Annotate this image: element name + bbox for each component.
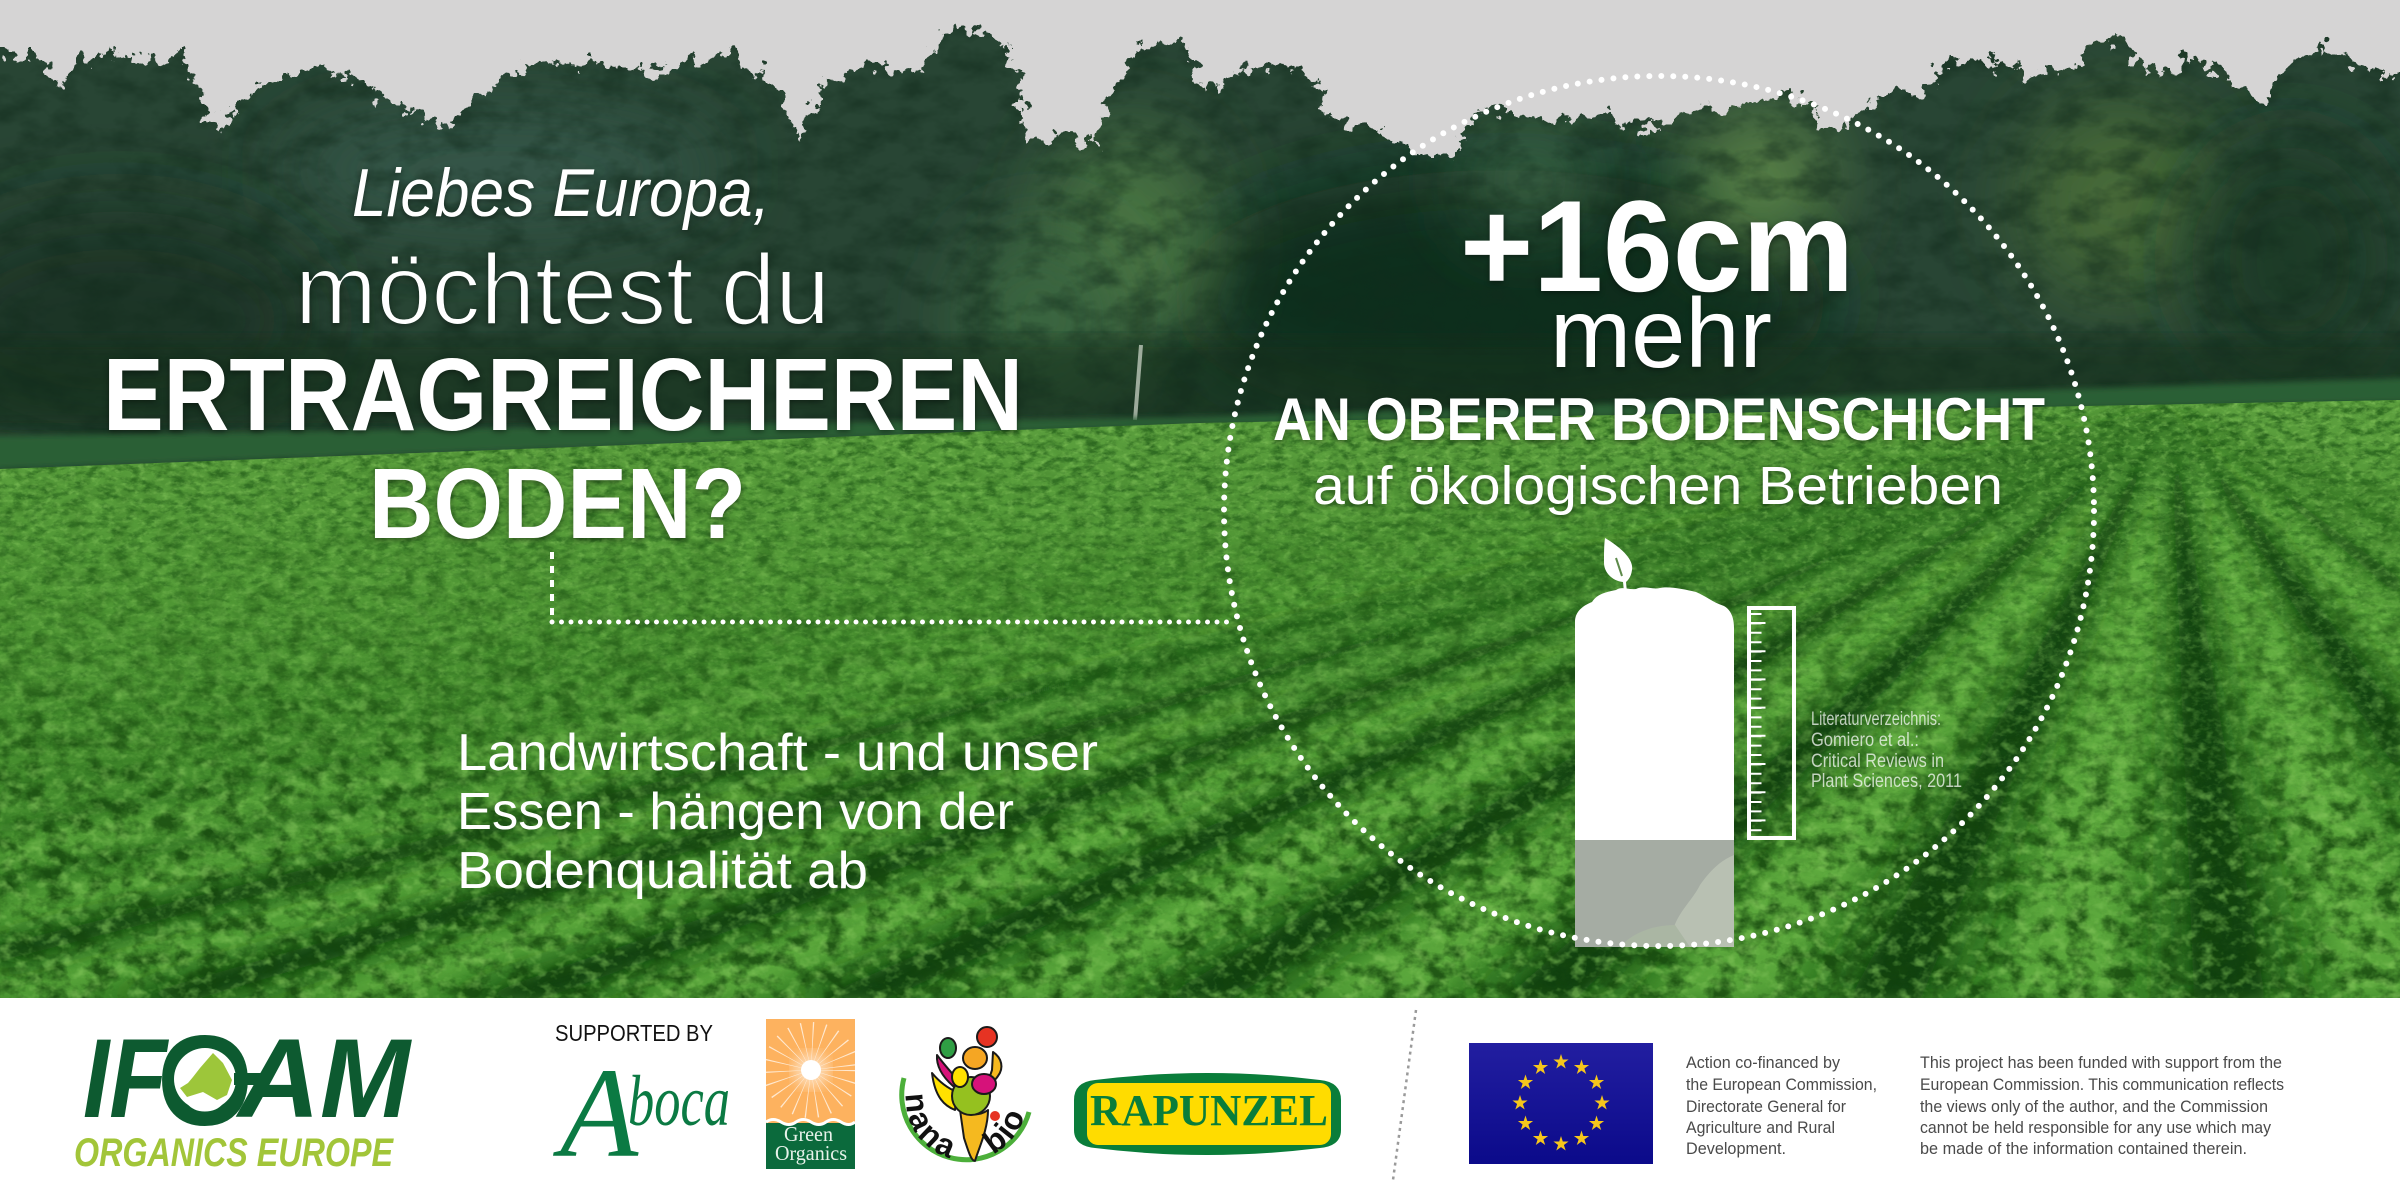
citation bbox=[1811, 709, 1962, 792]
logo: Aboca: boca bbox=[628, 1061, 730, 1141]
body text: Landwirtschaft - und unser bbox=[457, 724, 1098, 782]
body text: Bodenqualität ab bbox=[457, 842, 868, 900]
soil column translucent lower bbox=[1575, 840, 1734, 947]
disclaimer: cannot be held responsible for any use which may bbox=[1920, 1118, 2271, 1137]
co-financing note: Agriculture and Rural bbox=[1686, 1118, 1835, 1137]
dotted connector from headline to circle bbox=[552, 552, 1228, 622]
body text bbox=[457, 724, 1098, 900]
body text: Essen - hängen von der bbox=[457, 783, 1014, 841]
EU flag bbox=[1469, 1043, 1653, 1164]
logo: Aboca: A bbox=[553, 1042, 639, 1184]
citation: Plant Sciences, 2011 bbox=[1811, 771, 1962, 792]
soil column white upper bbox=[1575, 587, 1734, 840]
dotted separator bbox=[1393, 1010, 1416, 1180]
big number: +16cm bbox=[1460, 173, 1854, 319]
logo: Green Organics: Organics bbox=[775, 1141, 847, 1165]
disclaimer bbox=[1920, 1053, 2284, 1158]
disclaimer: This project has been funded with support from the bbox=[1920, 1053, 2282, 1072]
citation: Gomiero et al.: bbox=[1811, 730, 1919, 751]
icon: soil column with leaf bbox=[1575, 538, 1734, 947]
caps label: AN OBERER BODENSCHICHT bbox=[1273, 386, 2045, 453]
logo: nana bio bbox=[899, 1026, 1032, 1162]
logo: Green Organics: Green bbox=[784, 1122, 833, 1146]
dotted circle bbox=[1224, 76, 2094, 946]
headline line: ERTRAGREICHEREN: ERTRAGREICHEREN bbox=[103, 337, 1023, 452]
logo: IFOAM Organics Europe: M bbox=[320, 1016, 413, 1141]
logo: Green Organics bbox=[766, 1019, 855, 1169]
logo: IFOAM Organics Europe: IF bbox=[83, 1016, 169, 1141]
footer band bbox=[0, 998, 2400, 1200]
logo: IFOAM Organics Europe bbox=[74, 1010, 413, 1175]
headline line: möchtest du: möchtest du bbox=[295, 234, 830, 346]
disclaimer: be made of the information contained therein. bbox=[1920, 1139, 2247, 1158]
citation: Critical Reviews in bbox=[1811, 751, 1944, 772]
logo subtitle: ORGANICS EUROPE bbox=[74, 1131, 394, 1175]
citation: Literaturverzeichnis: bbox=[1811, 709, 1941, 730]
icon: leaf bbox=[1604, 538, 1632, 592]
co-financing note: Directorate General for bbox=[1686, 1097, 1846, 1116]
sub label: auf ökologischen Betrieben bbox=[1313, 456, 2003, 516]
logo: IFOAM Organics Europe: O bbox=[157, 1010, 253, 1153]
word: mehr: mehr bbox=[1550, 278, 1772, 388]
logo: IFOAM Organics Europe: A bbox=[235, 1016, 320, 1141]
logo: nana bio: bio bbox=[981, 1112, 1023, 1154]
logo: nana bio: nana bbox=[905, 1094, 952, 1158]
co-financing note: the European Commission, bbox=[1686, 1075, 1877, 1094]
logo: Rapunzel bbox=[1074, 1073, 1341, 1155]
sky bbox=[0, 0, 2400, 153]
logo: Rapunzel: RAPUNZEL bbox=[1090, 1086, 1328, 1135]
circle statistic text bbox=[1273, 173, 2045, 516]
tree line bbox=[0, 0, 2400, 480]
icon: ruler bbox=[1749, 608, 1794, 838]
headline line: BODEN?: BODEN? bbox=[369, 448, 746, 560]
supported by label: SUPPORTED BY bbox=[555, 1020, 713, 1046]
shaded field band bbox=[0, 378, 2400, 469]
disclaimer: the views only of the author, and the Commission bbox=[1920, 1097, 2268, 1116]
co-financing note: Development. bbox=[1686, 1139, 1786, 1158]
co-financing note: Action co-financed by bbox=[1686, 1053, 1840, 1072]
disclaimer: European Commission. This communication reflects bbox=[1920, 1075, 2284, 1094]
co-financing note bbox=[1686, 1053, 1877, 1158]
potato field rows bbox=[0, 390, 2400, 1000]
headline line: Liebes Europa: Liebes Europa, bbox=[352, 155, 770, 231]
headline bbox=[103, 155, 1023, 560]
